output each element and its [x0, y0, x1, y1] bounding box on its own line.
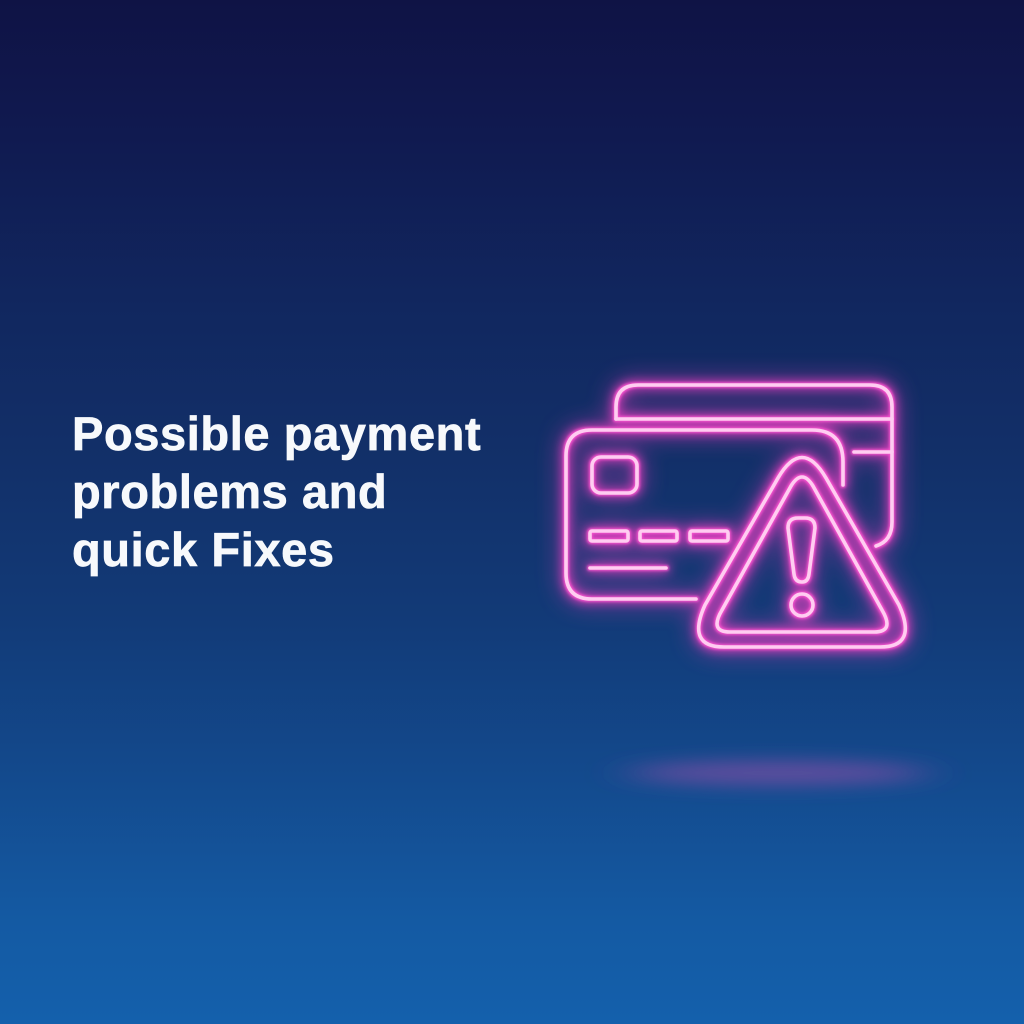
title: Possible payment [72, 407, 481, 460]
floor reflection glow [628, 761, 928, 785]
icon: front credit card [566, 430, 843, 599]
title: problems and [72, 465, 387, 518]
icon: neon credit cards with warning triangle [566, 385, 905, 647]
title: quick Fixes [72, 523, 335, 576]
icon: warning triangle [699, 458, 905, 647]
exclamation mark [788, 518, 815, 616]
card chip [592, 457, 637, 493]
icon: back credit card [616, 385, 892, 546]
card number dashes [590, 531, 728, 541]
title [72, 407, 481, 576]
card name line [590, 566, 666, 570]
